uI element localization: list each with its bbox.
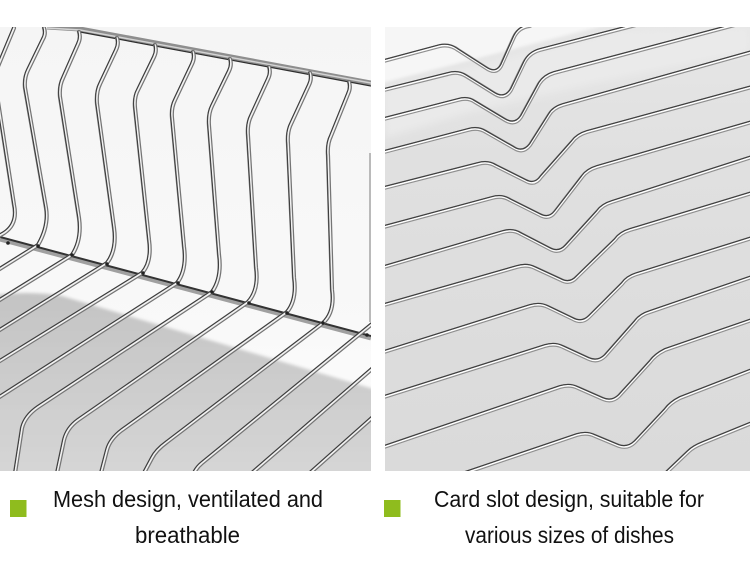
mesh wires [0,27,373,473]
rail weld knots [6,241,369,337]
slot wires [384,23,750,473]
top rail [47,27,371,86]
icon: green square bullet [384,500,400,517]
tray side highlight [390,116,438,130]
tray rim highlight [385,27,597,82]
right edge upright wire [369,153,371,322]
caption line 1: Card slot design, suitable for [434,486,704,512]
rack backdrop [0,27,371,180]
panel: card slot design photo [375,20,750,473]
floor shadow [0,293,380,480]
tray backdrop [385,27,750,471]
lower rail [0,237,371,338]
icon: green square bullet [10,500,26,517]
caption line 2: breathable [135,522,240,548]
panel: mesh design photo [0,27,380,480]
caption line 2: various sizes of dishes [465,522,674,548]
caption: mesh design [10,486,323,548]
caption: card slot design [384,486,704,548]
caption line 1: Mesh design, ventilated and [53,486,323,512]
